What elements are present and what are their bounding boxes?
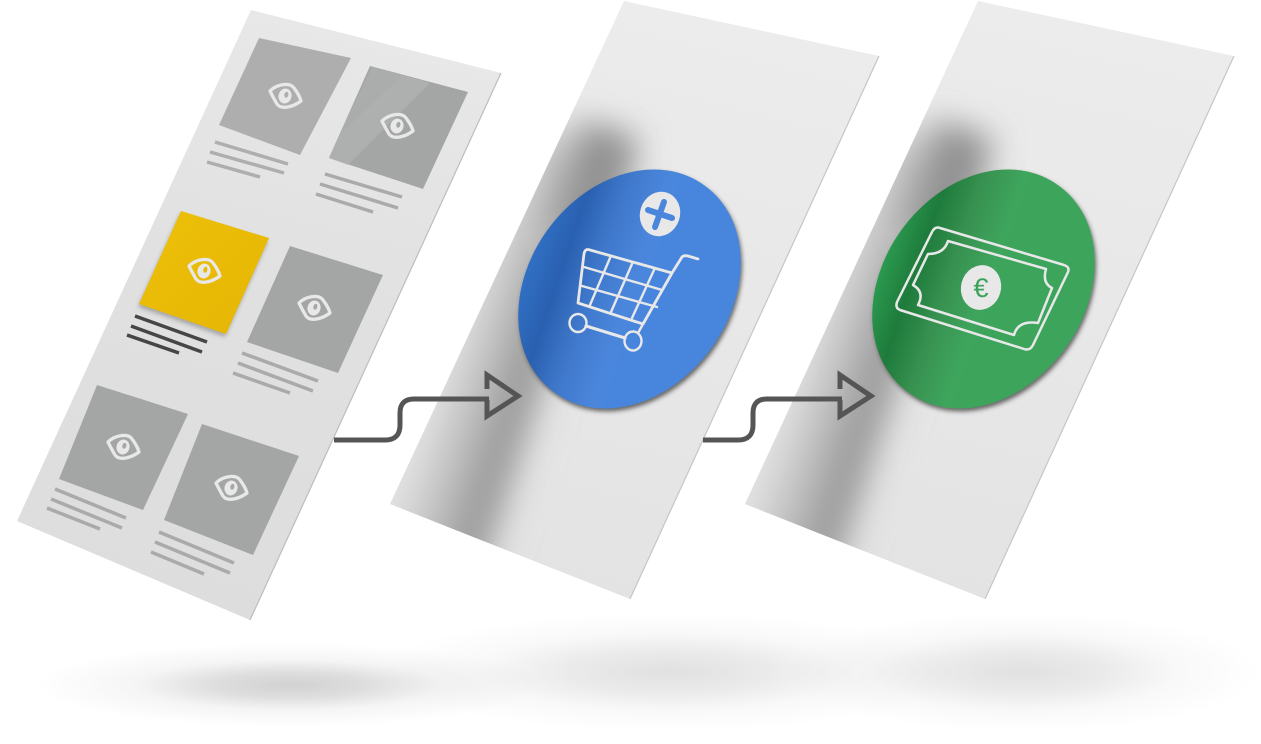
icon: shopping cart <box>570 250 698 350</box>
euro coin: € <box>973 273 989 303</box>
panel: add to cart <box>390 1 879 599</box>
euro coin <box>956 261 1006 314</box>
floor shadow <box>35 612 1261 732</box>
arrow: cart to payment <box>703 375 871 440</box>
product tile 2 <box>316 66 468 212</box>
blue badge with shopping cart <box>518 169 742 412</box>
product tile 6 <box>151 424 299 574</box>
green badge with banknote <box>872 169 1096 412</box>
icon: banknote <box>896 228 1068 350</box>
arrow: listing to cart <box>334 375 518 440</box>
highlighted product tile <box>127 211 269 353</box>
product tile 5 <box>47 385 188 529</box>
panel: product listing page <box>17 10 501 620</box>
product tile 4 <box>233 246 383 393</box>
panel: payment <box>745 1 1234 599</box>
product tile 1 <box>207 38 351 177</box>
icon: plus badge <box>634 186 686 242</box>
